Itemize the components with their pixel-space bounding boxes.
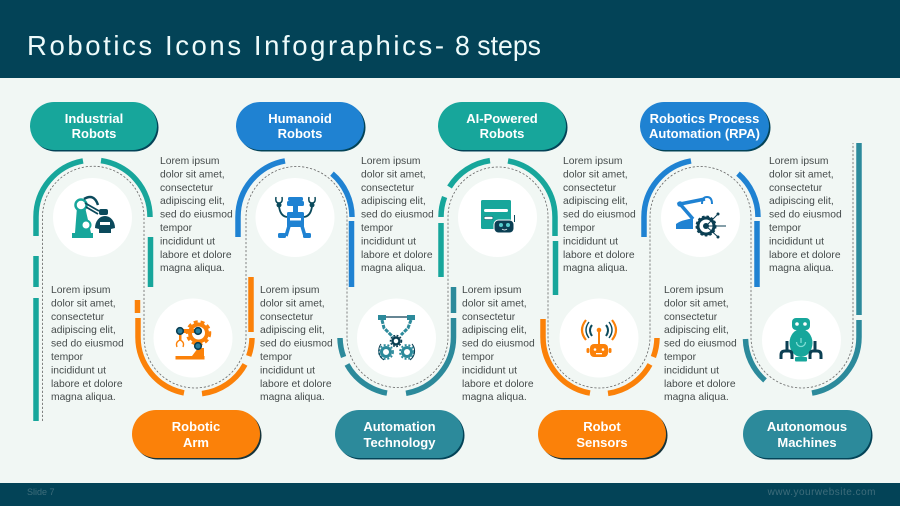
pill: Robot Sensors: Sensors — [576, 435, 628, 450]
header band — [0, 0, 900, 78]
text block: step 3: tempor — [361, 223, 394, 234]
text block: step 6: adipiscing elit, — [462, 325, 527, 336]
text block: step 4: dolor sit amet, — [260, 298, 325, 309]
icon: automation technology arms and gears — [357, 298, 436, 378]
text block: step 3: adipiscing elit, — [361, 196, 426, 207]
pill: Robotic Arm: Arm — [183, 435, 209, 450]
arc segments: step 4 automation technology — [340, 287, 454, 393]
text block: step 8: Lorem ipsum — [664, 285, 724, 296]
title: Robotics Icons Infographics- — [27, 30, 444, 61]
text block: step 5: adipiscing elit, — [563, 196, 628, 207]
text block: step 1: sed do eiusmod — [160, 210, 233, 221]
text block: step 2: adipiscing elit, — [51, 325, 116, 336]
text block: step 5: Lorem ipsum — [563, 156, 623, 167]
pill: Industrial Robots — [30, 102, 158, 152]
text block: step 8: magna aliqua. — [664, 392, 729, 403]
pill: Autonomous Machines — [743, 410, 872, 460]
text block: step 1: labore et dolore — [160, 250, 232, 261]
text block: step 6: dolor sit amet, — [462, 298, 527, 309]
text block: step 8: tempor — [664, 352, 697, 363]
text block: step 3: sed do eiusmod — [361, 210, 434, 221]
pill: Industrial Robots: Industrial — [65, 111, 123, 126]
text block: step 3: dolor sit amet, — [361, 169, 426, 180]
pill: Automation Technology — [335, 410, 464, 460]
icon: humanoid robot — [256, 178, 334, 257]
text block: step 3: labore et dolore — [361, 250, 433, 261]
arc segments: step 3 humanoid robots — [238, 161, 352, 287]
text block: step 7: consectetur — [769, 183, 823, 194]
text block: step 8: labore et dolore — [664, 379, 736, 390]
icon: robotic arm with gear — [154, 298, 232, 378]
text block: step 7: dolor sit amet, — [769, 169, 834, 180]
text block: step 7: Lorem ipsum — [769, 156, 829, 167]
text block: step 2: tempor — [51, 352, 84, 363]
text block: step 4: adipiscing elit, — [260, 325, 325, 336]
pill: Automation Technology: Technology — [364, 435, 436, 450]
arc segments: step 7 robotic process automation — [644, 161, 758, 287]
text block: step 1: tempor — [160, 223, 193, 234]
text block: step 2: sed do eiusmod — [51, 339, 124, 350]
text block: step 2: dolor sit amet, — [51, 298, 116, 309]
pill: Robotic Arm — [132, 410, 262, 460]
dashed connecting path — [42, 143, 853, 421]
text block: step 2: Lorem ipsum — [51, 285, 111, 296]
text block: step 7: tempor — [769, 223, 802, 234]
pill: Industrial Robots: Robots — [72, 126, 116, 141]
text block: step 1: incididunt ut — [160, 236, 215, 247]
text block: step 7: sed do eiusmod — [769, 210, 842, 221]
pill: AI-Powered Robots: Robots — [480, 126, 524, 141]
text block: step 3: Lorem ipsum — [361, 156, 421, 167]
text block: step 4: consectetur — [260, 312, 314, 323]
icon: robot with sensor waves — [560, 298, 638, 378]
text block: step 4: labore et dolore — [260, 379, 332, 390]
text block: step 4: magna aliqua. — [260, 392, 325, 403]
pill: Robot Sensors: Robot — [583, 419, 621, 434]
text block: step 7: magna aliqua. — [769, 263, 834, 274]
text block: step 5: incididunt ut — [563, 236, 618, 247]
title: 8 steps — [455, 30, 541, 61]
text block: step 8: adipiscing elit, — [664, 325, 729, 336]
pill: Robotics Process Automation: Automation (RPA) — [649, 126, 760, 141]
text block: step 3: magna aliqua. — [361, 263, 426, 274]
text block: step 3: consectetur — [361, 183, 415, 194]
arc segments: step 1 industrial robots — [36, 161, 150, 421]
text block: step 7: incididunt ut — [769, 236, 824, 247]
text block: step 1: adipiscing elit, — [160, 196, 225, 207]
arc segments: step 5 AI-powered robots — [441, 161, 556, 295]
icon: industrial robot arm with robot head — [53, 178, 132, 257]
text block: step 1: Lorem ipsum — [160, 156, 220, 167]
text block: step 2: labore et dolore — [51, 379, 123, 390]
footer band — [0, 483, 900, 506]
icon: RPA robot arm and gear — [661, 178, 740, 257]
text block: step 8: incididunt ut — [664, 365, 719, 376]
pill: Humanoid Robots: Robots — [278, 126, 322, 141]
text block: step 5: labore et dolore — [563, 250, 635, 261]
pill: Robotics Process Automation — [640, 102, 770, 152]
text block: step 6: incididunt ut — [462, 365, 517, 376]
text block: step 5: dolor sit amet, — [563, 169, 628, 180]
text block: step 6: Lorem ipsum — [462, 285, 522, 296]
pill: Robotics Process Automation: Robotics Process — [650, 111, 759, 126]
text block: step 1: dolor sit amet, — [160, 169, 225, 180]
pill: Robotic Arm: Robotic — [172, 419, 220, 434]
text block: step 8: dolor sit amet, — [664, 298, 729, 309]
arc segments: step 8 autonomous machines — [746, 143, 859, 393]
pill: Humanoid Robots — [236, 102, 366, 152]
text block: step 7: adipiscing elit, — [769, 196, 834, 207]
text block: step 8: sed do eiusmod — [664, 339, 737, 350]
icon: AI chat window with robot — [458, 178, 537, 257]
icon: autonomous robot with power button — [762, 300, 841, 380]
footer band: Slide 7 — [27, 487, 55, 497]
text block: step 6: labore et dolore — [462, 379, 534, 390]
text block: step 2: consectetur — [51, 312, 105, 323]
text block: step 6: tempor — [462, 352, 495, 363]
text block: step 2: magna aliqua. — [51, 392, 116, 403]
pill: AI-Powered Robots: AI-Powered — [466, 111, 538, 126]
pill: Autonomous Machines: Machines — [777, 435, 837, 450]
text block: step 1: magna aliqua. — [160, 263, 225, 274]
text block: step 5: tempor — [563, 223, 596, 234]
text block: step 8: consectetur — [664, 312, 718, 323]
text block: step 5: sed do eiusmod — [563, 210, 636, 221]
text block: step 4: sed do eiusmod — [260, 339, 333, 350]
pill: AI-Powered Robots — [438, 102, 568, 152]
arc segments: step 6 robot sensors — [543, 319, 657, 393]
text block: step 6: sed do eiusmod — [462, 339, 535, 350]
text block: step 6: magna aliqua. — [462, 392, 527, 403]
text block: step 5: magna aliqua. — [563, 263, 628, 274]
text block: step 4: incididunt ut — [260, 365, 315, 376]
text block: step 1: consectetur — [160, 183, 214, 194]
pill: Robot Sensors — [538, 410, 668, 460]
text block: step 2: incididunt ut — [51, 365, 106, 376]
pill: Automation Technology: Automation — [363, 419, 436, 434]
text block: step 4: tempor — [260, 352, 293, 363]
pill: Humanoid Robots: Humanoid — [268, 111, 332, 126]
text block: step 6: consectetur — [462, 312, 516, 323]
text block: step 5: consectetur — [563, 183, 617, 194]
pill: Autonomous Machines: Autonomous — [767, 419, 847, 434]
text block: step 7: labore et dolore — [769, 250, 841, 261]
footer band: www.yourwebsite.com — [767, 487, 876, 498]
text block: step 3: incididunt ut — [361, 236, 416, 247]
arc segments: step 2 robotic arm — [138, 277, 252, 394]
text block: step 4: Lorem ipsum — [260, 285, 320, 296]
